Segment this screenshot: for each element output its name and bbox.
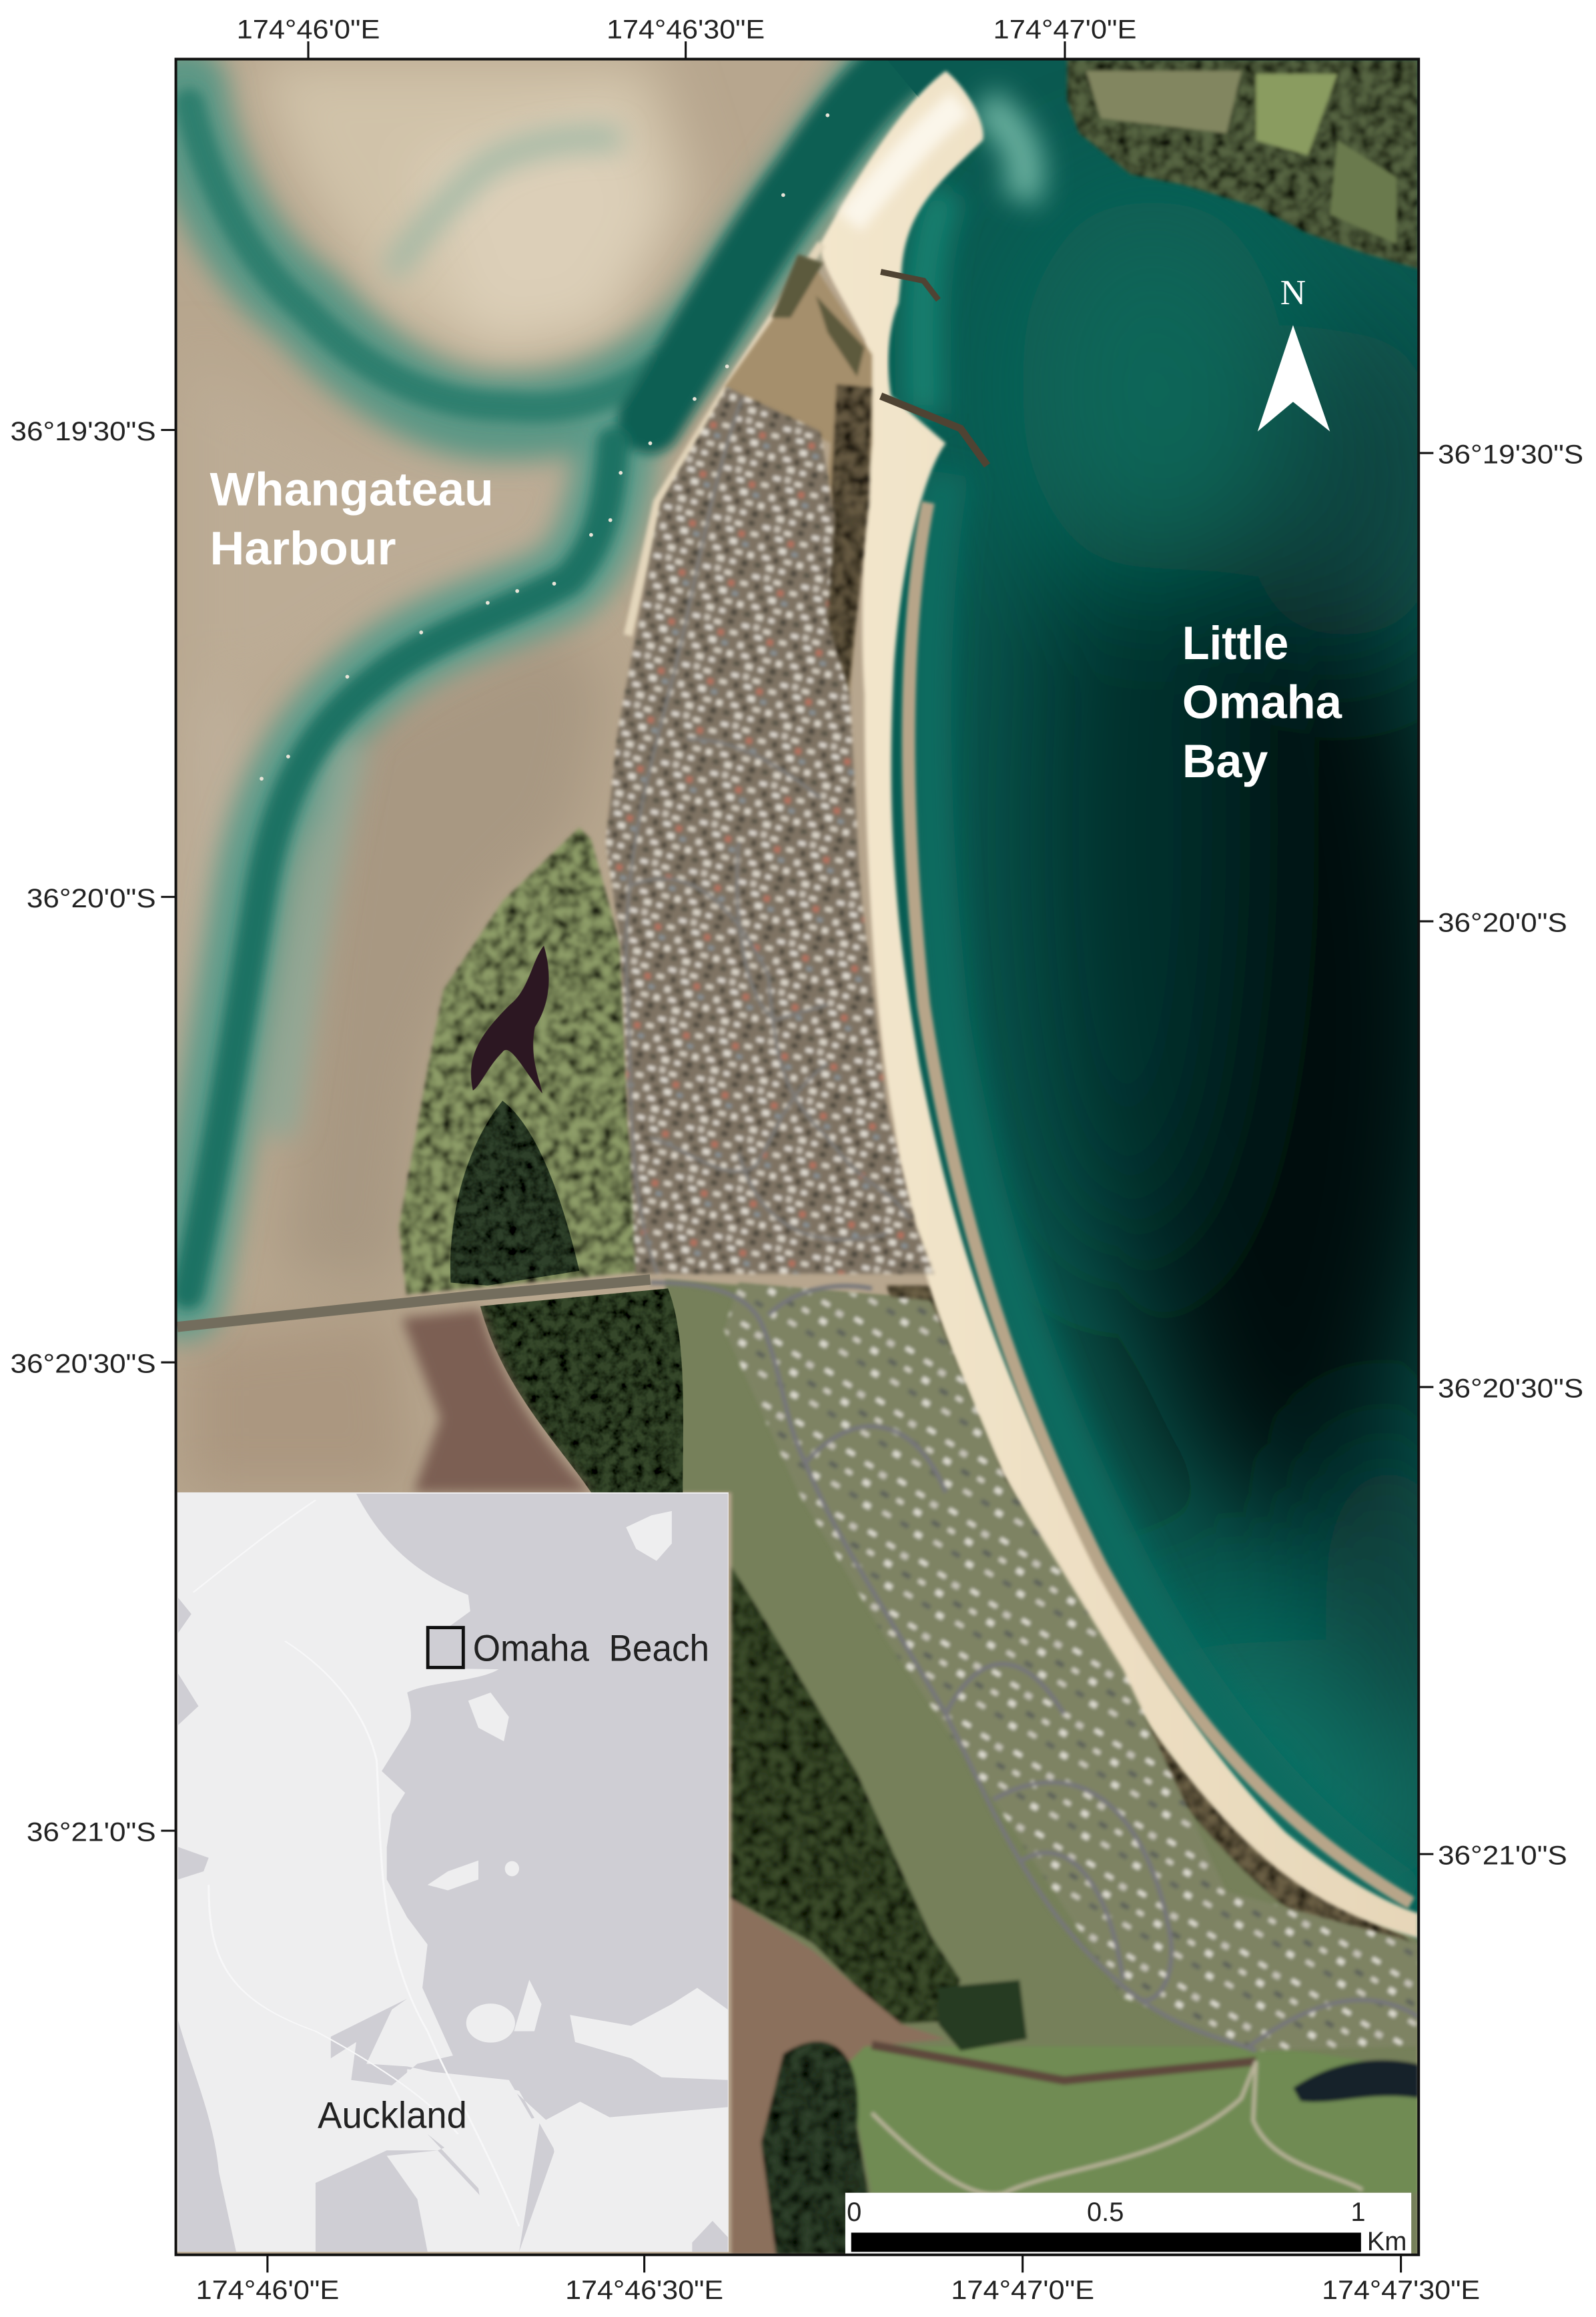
left latitude labels: 36°20'0"S [27,884,156,913]
top longitude labels: 174°46'30"E [607,15,765,45]
scale bar: Km [1367,2227,1407,2256]
inset label: Omaha Beach: Omaha Beach [473,1627,709,1669]
inset west coast [178,1598,236,2252]
Little Omaha Bay sea [886,60,1417,1945]
place label: Little Omaha Bay: Omaha [1182,676,1342,729]
southern suburb houses [651,1282,1419,2051]
place label: Whangateau Harbour: Whangateau [210,463,494,516]
right latitude labels: 36°20'30"S [1438,1374,1583,1404]
right latitude labels: 36°21'0"S [1438,1841,1567,1871]
forest south of causeway [480,1288,683,1492]
southern land [665,1280,1419,2255]
top longitude labels: 174°46'0"E [237,15,380,45]
inset islands [387,1511,728,2252]
golf course forest [450,1101,579,1286]
map frame [176,59,1419,2255]
northern suburb houses [606,387,934,1274]
left latitude labels: 36°20'30"S [11,1350,156,1379]
place label: Little Omaha Bay: Bay [1182,735,1268,788]
inset locator map [177,1492,729,2252]
left latitude labels: 36°19'30"S [11,417,156,446]
golf course and reserves [399,254,872,1294]
tidal channels [183,59,909,1300]
top longitude labels [237,15,1136,45]
bottom longitude labels: 174°47'30"E [1322,2276,1480,2305]
right latitude labels: 36°20'0"S [1438,908,1567,937]
bottom longitude labels [195,2276,1480,2305]
moored boats [260,113,829,781]
bottom longitude labels: 174°46'0"E [195,2276,339,2305]
tidal sand flats [176,59,1419,2255]
beach and spit [628,71,1419,1939]
satellite image [176,59,1478,2255]
top longitude labels: 174°47'0"E [993,15,1136,45]
inset sea [316,1494,728,2252]
scale bar: 0 [847,2198,861,2227]
scale bar: 0.5 [1087,2198,1124,2227]
place label: Whangateau Harbour [210,463,494,575]
place label: Little Omaha Bay [1182,617,1342,788]
icon: north arrow [1258,274,1330,432]
mudflat margin [402,1309,591,1492]
coordinate ticks [161,41,1433,2272]
groynes [881,272,987,466]
lake [471,945,549,1093]
bottom longitude labels: 174°47'0"E [951,2276,1094,2305]
icon: north arrow: N [1280,274,1306,312]
place label: Little Omaha Bay: Little [1182,617,1288,670]
inset roads [193,1500,519,2226]
bottom longitude labels: 174°46'30"E [565,2276,723,2305]
right latitude labels [1438,440,1583,1871]
scale bar: 1 [1350,2198,1365,2227]
scale bar [845,2193,1411,2256]
northern headland [1067,59,1419,269]
left latitude labels: 36°21'0"S [27,1818,156,1847]
inset label: Auckland: Auckland [318,2094,467,2136]
causeway road [177,1280,651,1327]
left latitude labels [11,417,156,1847]
right latitude labels: 36°19'30"S [1438,440,1583,470]
place label: Whangateau Harbour: Harbour [210,522,396,575]
